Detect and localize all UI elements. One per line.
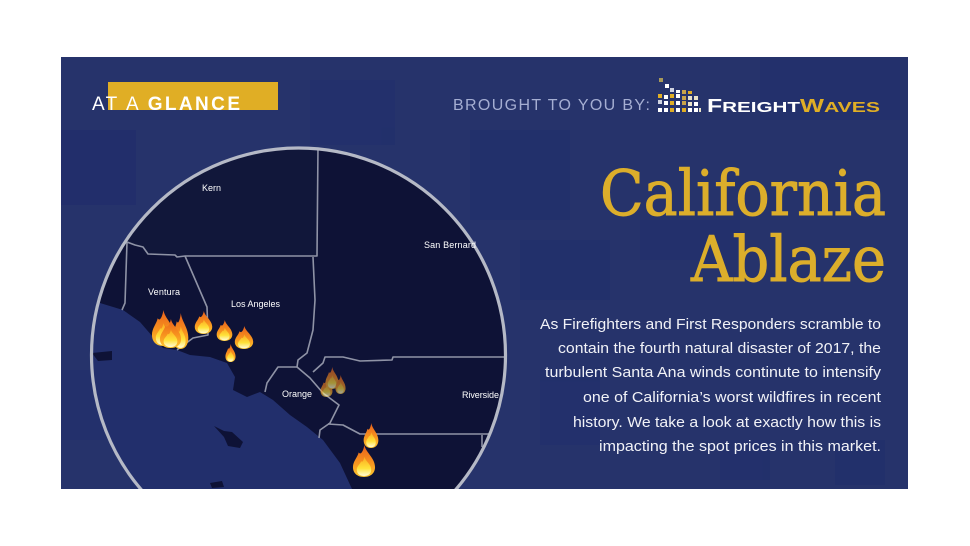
county labels (148, 183, 499, 400)
text block: intro paragraph: As Firefighters and First Responders scramble to (540, 316, 881, 333)
sponsor label: BROUGHT TO YOU BY: (453, 97, 650, 114)
text block: intro paragraph: turbulent Santa Ana winds continute to intensify (545, 364, 882, 381)
icon: San Diego fires (353, 423, 378, 477)
county labels: Orange (282, 389, 312, 399)
text block: intro paragraph: history. We take a look at exactly how this is (573, 414, 881, 431)
panel: navy background (61, 57, 908, 489)
icon: Los Angeles fires (195, 311, 253, 362)
text block: intro paragraph: impacting the spot prices in this market. (599, 438, 881, 455)
county labels: Riverside (462, 390, 499, 400)
county labels: San Bernard (424, 240, 476, 250)
logo wordmark: W AVES (800, 96, 880, 116)
ocean (80, 300, 352, 489)
county labels: Ventura (148, 287, 180, 297)
logo wordmark (707, 96, 880, 116)
Kern county shade (80, 140, 318, 257)
county labels: Los Angeles (231, 299, 280, 309)
title (600, 157, 886, 296)
heading: at a glance: AT A GLANCE (92, 94, 240, 115)
county lines (122, 147, 510, 447)
map ring (90, 146, 508, 489)
heading: at a glance (92, 82, 278, 115)
logo wordmark: F REIGHT (707, 96, 800, 116)
icon: Ventura fire cluster (152, 310, 188, 349)
land (100, 150, 504, 489)
title: California (600, 157, 886, 230)
text block: intro paragraph: contain the fourth natural disaster of 2017, the (558, 340, 881, 357)
county labels: Kern (202, 183, 221, 193)
islands (92, 351, 243, 488)
text block: intro paragraph: one of California’s worst wildfires in recent (583, 389, 882, 406)
icon: logo dot equalizer (658, 78, 701, 112)
title: Ablaze (690, 223, 886, 296)
icon: Orange county fire (faded) (321, 367, 346, 397)
logo: FreightWaves (658, 78, 880, 116)
map: Southern California counties in circle (90, 146, 508, 489)
text block: intro paragraph (540, 316, 882, 455)
